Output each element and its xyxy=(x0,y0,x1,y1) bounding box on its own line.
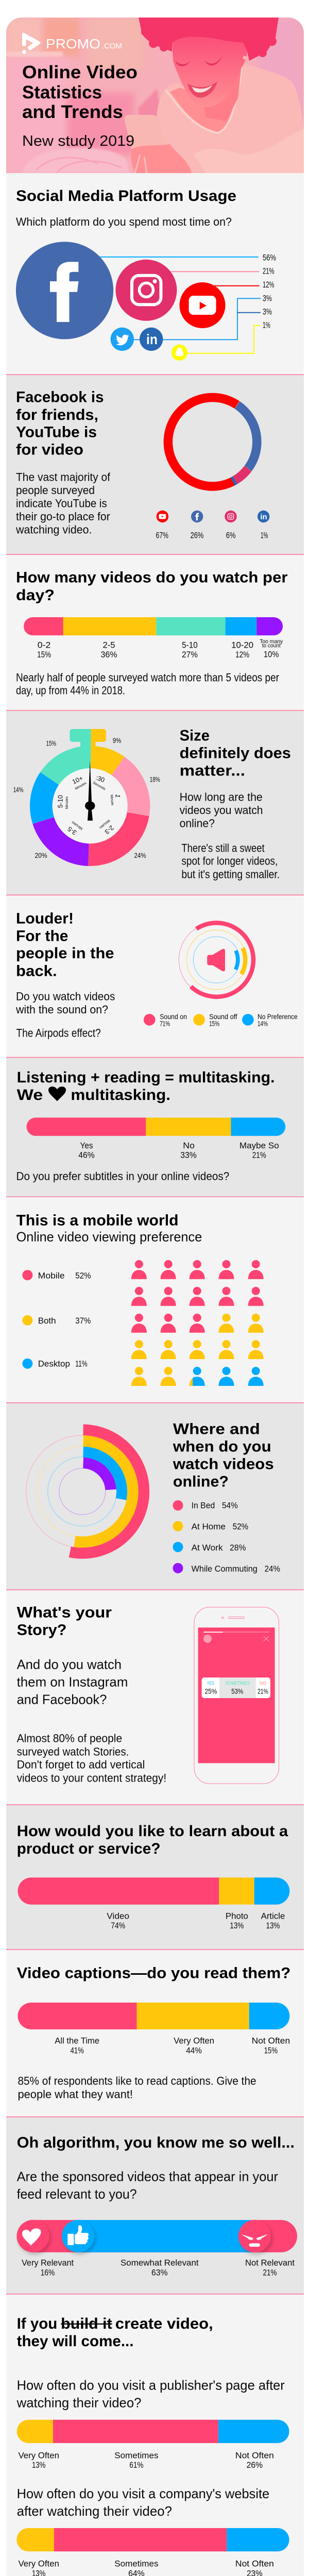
question 2: after watching their video? xyxy=(17,2503,172,2519)
bar labels: All the Time xyxy=(55,2036,99,2046)
question 2: How often do you visit a company's website xyxy=(17,2486,269,2501)
stopwatch ring segments xyxy=(22,738,158,874)
question: feed relevant to you? xyxy=(17,2186,137,2201)
icon: small linkedin xyxy=(258,511,269,522)
dial labels: Minutes xyxy=(75,781,88,791)
bar labels: 10-20 xyxy=(231,640,253,650)
body text: but it's getting smaller. xyxy=(181,868,280,880)
heading xyxy=(173,1420,274,1490)
face xyxy=(172,37,247,107)
subtitle: New study 2019 xyxy=(22,133,134,149)
neckline chest xyxy=(170,88,233,132)
percentage labels: 3% xyxy=(263,307,272,317)
dial labels: Minutes xyxy=(98,819,111,829)
heading: when do you xyxy=(173,1438,271,1455)
heading: Oh algorithm, you know me so well... xyxy=(17,2134,295,2151)
bar labels: 10% xyxy=(264,649,279,659)
percentage labels: 21% xyxy=(263,266,274,276)
question 1 xyxy=(16,2377,285,2410)
stacked bar 1 xyxy=(17,2420,289,2443)
dial labels: 3-5 xyxy=(66,825,78,836)
heading: Video captions—do you read them? xyxy=(17,1964,290,1981)
percentage labels: 18% xyxy=(150,775,160,784)
percentage labels: 24% xyxy=(134,851,146,859)
bar labels 1: Very Often xyxy=(18,2450,59,2460)
bar labels 1: Sometimes xyxy=(114,2450,158,2460)
stopwatch crown xyxy=(70,729,106,749)
title: Online Video xyxy=(22,62,138,82)
poll card xyxy=(202,1677,270,1698)
heading: Size xyxy=(180,727,210,744)
dial labels: Minute xyxy=(110,794,114,806)
percentage labels: 3% xyxy=(263,293,272,303)
panel: create video xyxy=(6,2294,304,2576)
poll card: 25% xyxy=(205,1687,217,1695)
bar labels: Article xyxy=(261,1911,285,1921)
stacked bar xyxy=(24,617,283,635)
body text: 85% of respondents like to read captions. Give the xyxy=(18,2075,256,2088)
percentage labels: 9% xyxy=(113,736,121,744)
body text xyxy=(181,841,280,880)
bar labels xyxy=(78,1141,279,1160)
heading: This is a mobile world xyxy=(16,1212,179,1229)
percentage labels: 1% xyxy=(263,320,270,330)
icon: twitter bubble xyxy=(111,328,134,351)
share labels: 26% xyxy=(191,530,203,540)
question xyxy=(17,2168,278,2201)
poll card: 53% xyxy=(231,1687,243,1695)
body text xyxy=(17,1732,166,1784)
question 1: How often do you visit a publisher's page after xyxy=(17,2377,285,2393)
neck xyxy=(204,68,241,121)
share labels: 6% xyxy=(226,530,236,540)
location legend: At Home xyxy=(192,1521,226,1531)
heading: build it xyxy=(61,2315,112,2332)
icon: angry face button xyxy=(238,2220,271,2252)
body text: surveyed watch Stories. xyxy=(17,1745,129,1758)
heading: product or service? xyxy=(17,1840,161,1857)
location legend: 52% xyxy=(233,1521,248,1531)
sound legend: Sound on xyxy=(160,1012,187,1021)
device legend: Both xyxy=(38,1316,56,1326)
body text: videos to your content strategy! xyxy=(17,1771,166,1784)
bar labels 1 xyxy=(18,2450,274,2470)
device legend xyxy=(22,1270,91,1369)
location legend: In Bed xyxy=(192,1501,215,1511)
question: them on Instagram xyxy=(17,1674,128,1689)
icon: speaker xyxy=(207,949,225,971)
stacked bar xyxy=(18,1877,289,1905)
heading xyxy=(17,1823,288,1857)
bar labels xyxy=(107,1911,285,1930)
donut chart xyxy=(164,393,262,491)
poll card: 21% xyxy=(258,1687,268,1695)
heading: Listening + reading = multitasking. xyxy=(17,1069,275,1086)
bar labels 2 xyxy=(18,2559,274,2576)
bar labels: 44% xyxy=(186,2045,202,2055)
percentage labels: 14% xyxy=(13,785,23,793)
question xyxy=(180,790,263,829)
panel: sound on xyxy=(6,895,304,1057)
heading: online? xyxy=(173,1473,229,1490)
bar labels 2: Not Often xyxy=(235,2559,274,2569)
dial labels: 2-3 xyxy=(104,824,115,836)
heading: YouTube is xyxy=(16,424,97,441)
panel: video captions xyxy=(6,1950,304,2116)
body text: The vast majority of xyxy=(16,470,111,483)
poll card: YES xyxy=(207,1681,214,1686)
bar labels: 21% xyxy=(252,1150,266,1160)
panel: videos per day xyxy=(6,554,304,710)
heading: matter... xyxy=(180,762,245,779)
phone illustration xyxy=(194,1607,279,1784)
stacked bar xyxy=(18,2003,289,2029)
bar labels: Too many xyxy=(260,638,283,645)
body text: watching video. xyxy=(15,523,92,536)
poll card: SOMETIMES xyxy=(226,1681,250,1686)
panel: mobile world xyxy=(6,1197,304,1402)
bar labels 2: Very Often xyxy=(18,2559,59,2569)
dial labels: Minutes xyxy=(65,796,69,809)
hero banner with photo of woman holding a phone xyxy=(6,18,304,173)
heading: Story? xyxy=(17,1621,66,1638)
panel: multitasking xyxy=(6,1057,304,1197)
question: And do you watch xyxy=(17,1656,122,1672)
question: with the sound on? xyxy=(15,1003,108,1016)
icon: small facebook xyxy=(191,511,203,522)
title: Statistics xyxy=(22,82,102,103)
heading xyxy=(16,569,288,604)
bar labels: Not Often xyxy=(252,2036,290,2046)
body text: people surveyed xyxy=(16,484,95,497)
question 2 xyxy=(17,2486,269,2519)
sound legend: 15% xyxy=(209,1019,219,1027)
track labels: 21% xyxy=(263,2267,277,2277)
dial labels: 10+ xyxy=(71,774,84,786)
bar labels: 33% xyxy=(180,1150,197,1160)
percentage labels: 20% xyxy=(35,851,47,859)
sound legend: 71% xyxy=(160,1019,170,1027)
track labels xyxy=(22,2258,295,2277)
question: Are the sponsored videos that appear in your xyxy=(17,2168,278,2184)
body text xyxy=(18,2075,256,2100)
percentage labels xyxy=(263,253,276,330)
percentage labels: 12% xyxy=(263,280,274,290)
bar labels xyxy=(55,2036,290,2055)
heading: definitely does xyxy=(180,744,291,761)
question xyxy=(17,1656,128,1707)
heading: multitasking. xyxy=(71,1087,170,1104)
heading: If you xyxy=(17,2315,57,2332)
dial labels: Seconds xyxy=(92,781,106,791)
heading: day? xyxy=(16,587,55,604)
question: videos you watch xyxy=(180,804,263,817)
hand xyxy=(131,144,192,173)
question: How long are the xyxy=(180,790,263,803)
body text xyxy=(15,470,111,536)
sound legend: Sound off xyxy=(209,1012,237,1021)
poll card: NO xyxy=(260,1681,266,1686)
location legend xyxy=(173,1500,280,1573)
bar labels: 41% xyxy=(70,2045,84,2055)
icon: heart button xyxy=(16,2220,49,2252)
body text: Almost 80% of people xyxy=(17,1732,122,1745)
title xyxy=(23,65,137,118)
bar labels: Maybe So xyxy=(239,1141,279,1150)
bar labels 1: 13% xyxy=(32,2460,45,2470)
heading: back. xyxy=(16,962,57,979)
track labels: Not Relevant xyxy=(245,2258,295,2268)
body text: their go-to place for xyxy=(16,510,110,523)
promo logo xyxy=(22,32,122,54)
body text: spot for longer videos, xyxy=(181,855,278,868)
title: and Trends xyxy=(22,102,123,122)
body text: day, up from 44% in 2018. xyxy=(16,684,125,697)
bar labels: 5-10 xyxy=(182,640,198,650)
heading: Social Media Platform Usage xyxy=(16,188,236,205)
heading: for video xyxy=(16,442,83,459)
mouth xyxy=(187,81,217,98)
track labels: 63% xyxy=(151,2267,168,2277)
percentage labels xyxy=(13,736,160,859)
bar labels: Photo xyxy=(226,1911,248,1921)
question 1: watching their video? xyxy=(16,2395,142,2410)
sound legend: 14% xyxy=(258,1019,268,1027)
question: online? xyxy=(180,817,215,829)
dial labels: :30 xyxy=(95,774,106,784)
bar labels xyxy=(38,639,283,657)
bar labels: 13% xyxy=(266,1921,280,1930)
bar labels: 36% xyxy=(101,650,117,659)
track labels: Very Relevant xyxy=(22,2258,74,2268)
sound legend: No Preference xyxy=(258,1012,298,1021)
bar labels 1: Not Often xyxy=(235,2450,274,2460)
panel: learn about a product xyxy=(6,1804,304,1950)
heading: people in the xyxy=(16,945,114,962)
icon: thumbs up button xyxy=(62,2220,94,2252)
promo logo: .COM xyxy=(102,42,122,50)
dial labels: 1 xyxy=(114,793,122,799)
percentage labels: 56% xyxy=(263,253,276,263)
track labels: 16% xyxy=(41,2267,55,2277)
duvet xyxy=(194,129,304,173)
phone xyxy=(125,115,159,150)
panel: algorithm relevance xyxy=(6,2116,304,2294)
location legend: 54% xyxy=(222,1501,238,1511)
icon: small instagram xyxy=(225,511,237,522)
share labels xyxy=(156,532,268,538)
heading: How many videos do you watch per xyxy=(16,569,288,586)
body text: Don't forget to add vertical xyxy=(17,1758,145,1771)
location legend: At Work xyxy=(192,1543,223,1552)
location legend: 24% xyxy=(265,1564,280,1573)
question: Do you watch videos xyxy=(16,990,115,1003)
percentage labels: 15% xyxy=(46,739,56,748)
stopwatch needle xyxy=(85,760,95,821)
heading: What's your xyxy=(17,1604,112,1621)
body text xyxy=(16,671,279,697)
body text: people what they want! xyxy=(18,2088,133,2100)
track labels: Somewhat Relevant xyxy=(121,2258,199,2268)
heading: they will come... xyxy=(17,2333,133,2350)
panel: facebook vs youtube xyxy=(6,375,304,554)
aside: The Airpods effect? xyxy=(16,1027,101,1040)
ear stud xyxy=(243,56,246,60)
device legend: Mobile xyxy=(38,1271,64,1281)
device legend: 11% xyxy=(75,1359,88,1369)
bar labels: 27% xyxy=(182,650,198,659)
bar labels: No xyxy=(183,1141,195,1150)
device legend: 37% xyxy=(75,1316,91,1326)
icon: snapchat bubble xyxy=(171,345,187,361)
question: Which platform do you spend most time on? xyxy=(16,215,232,228)
heading: Louder! xyxy=(16,910,74,927)
icon: small youtube xyxy=(157,511,168,522)
person pictogram grid xyxy=(131,1260,264,1386)
device legend: Desktop xyxy=(38,1359,70,1369)
heading xyxy=(180,727,291,779)
heading: We xyxy=(17,1087,43,1104)
stopwatch dial xyxy=(53,768,128,843)
subheading: Online video viewing preference xyxy=(16,1229,202,1244)
leader lines xyxy=(100,257,261,353)
icon: linkedin bubble: in xyxy=(146,331,158,347)
bar labels: 13% xyxy=(230,1921,244,1930)
heading xyxy=(16,910,114,979)
bar labels 2: Sometimes xyxy=(114,2559,158,2569)
radial bar chart xyxy=(20,1429,145,1554)
bar labels: 2-5 xyxy=(103,640,115,650)
icon: small linkedin: in xyxy=(260,513,267,521)
heading: How would you like to learn about a xyxy=(17,1823,288,1840)
panel: video length xyxy=(6,710,304,895)
heading: for friends, xyxy=(16,406,98,423)
stacked bar 2 xyxy=(16,2528,289,2551)
location legend: While Commuting xyxy=(192,1564,258,1573)
heading: watch videos xyxy=(173,1455,274,1472)
bar labels: to count xyxy=(262,643,281,649)
dial labels: 5-10 xyxy=(57,795,64,808)
question xyxy=(15,990,115,1016)
dial labels: Minutes xyxy=(71,820,83,831)
panel: stories xyxy=(6,1590,304,1804)
panel: social media platform usage xyxy=(6,173,304,375)
heading: For the xyxy=(16,928,68,945)
stacked bar xyxy=(26,1117,285,1136)
question: Do you prefer subtitles in your online videos? xyxy=(16,1170,229,1183)
bar labels 1: 61% xyxy=(129,2460,144,2470)
heading xyxy=(17,1069,275,1104)
shirt xyxy=(157,63,304,173)
icon: promo play mark xyxy=(22,32,41,54)
heading: Where and xyxy=(173,1420,260,1437)
bar labels: Video xyxy=(107,1911,129,1921)
radial sound chart xyxy=(165,909,267,1011)
device legend: 52% xyxy=(75,1271,91,1281)
dial labels xyxy=(57,774,122,836)
bar labels: Very Often xyxy=(174,2036,214,2046)
heading xyxy=(17,2315,213,2350)
promo logo: PROMO xyxy=(46,36,100,52)
stopwatch chart xyxy=(13,729,160,874)
bar labels: 15% xyxy=(264,2045,278,2055)
panel: where and when xyxy=(6,1402,304,1590)
bar labels: 15% xyxy=(37,650,51,659)
bar labels: 12% xyxy=(235,650,249,659)
icon: instagram bubble xyxy=(115,260,177,321)
icon: linkedin bubble xyxy=(140,328,163,351)
heading xyxy=(17,1604,112,1638)
bar labels: 74% xyxy=(111,1921,125,1930)
question: and Facebook? xyxy=(17,1691,107,1707)
bar labels: 0-2 xyxy=(38,640,50,650)
bar labels 1: 26% xyxy=(247,2460,263,2470)
icon: youtube bubble xyxy=(179,282,226,328)
body text: indicate YouTube is xyxy=(16,497,107,510)
location legend: 28% xyxy=(230,1543,246,1552)
bar labels: 46% xyxy=(78,1150,95,1160)
eyes and brows xyxy=(175,56,222,66)
body text: There's still a sweet xyxy=(181,841,265,854)
sound legend xyxy=(144,1012,298,1027)
share labels: 1% xyxy=(261,530,268,540)
icon: facebook bubble xyxy=(16,242,113,339)
hair xyxy=(139,18,279,61)
share labels: 67% xyxy=(156,530,168,540)
relevance track xyxy=(16,2220,297,2252)
bar labels: Yes xyxy=(80,1141,93,1150)
heading: Facebook is xyxy=(16,389,104,406)
heading xyxy=(16,389,104,459)
heading: create video, xyxy=(115,2315,213,2332)
